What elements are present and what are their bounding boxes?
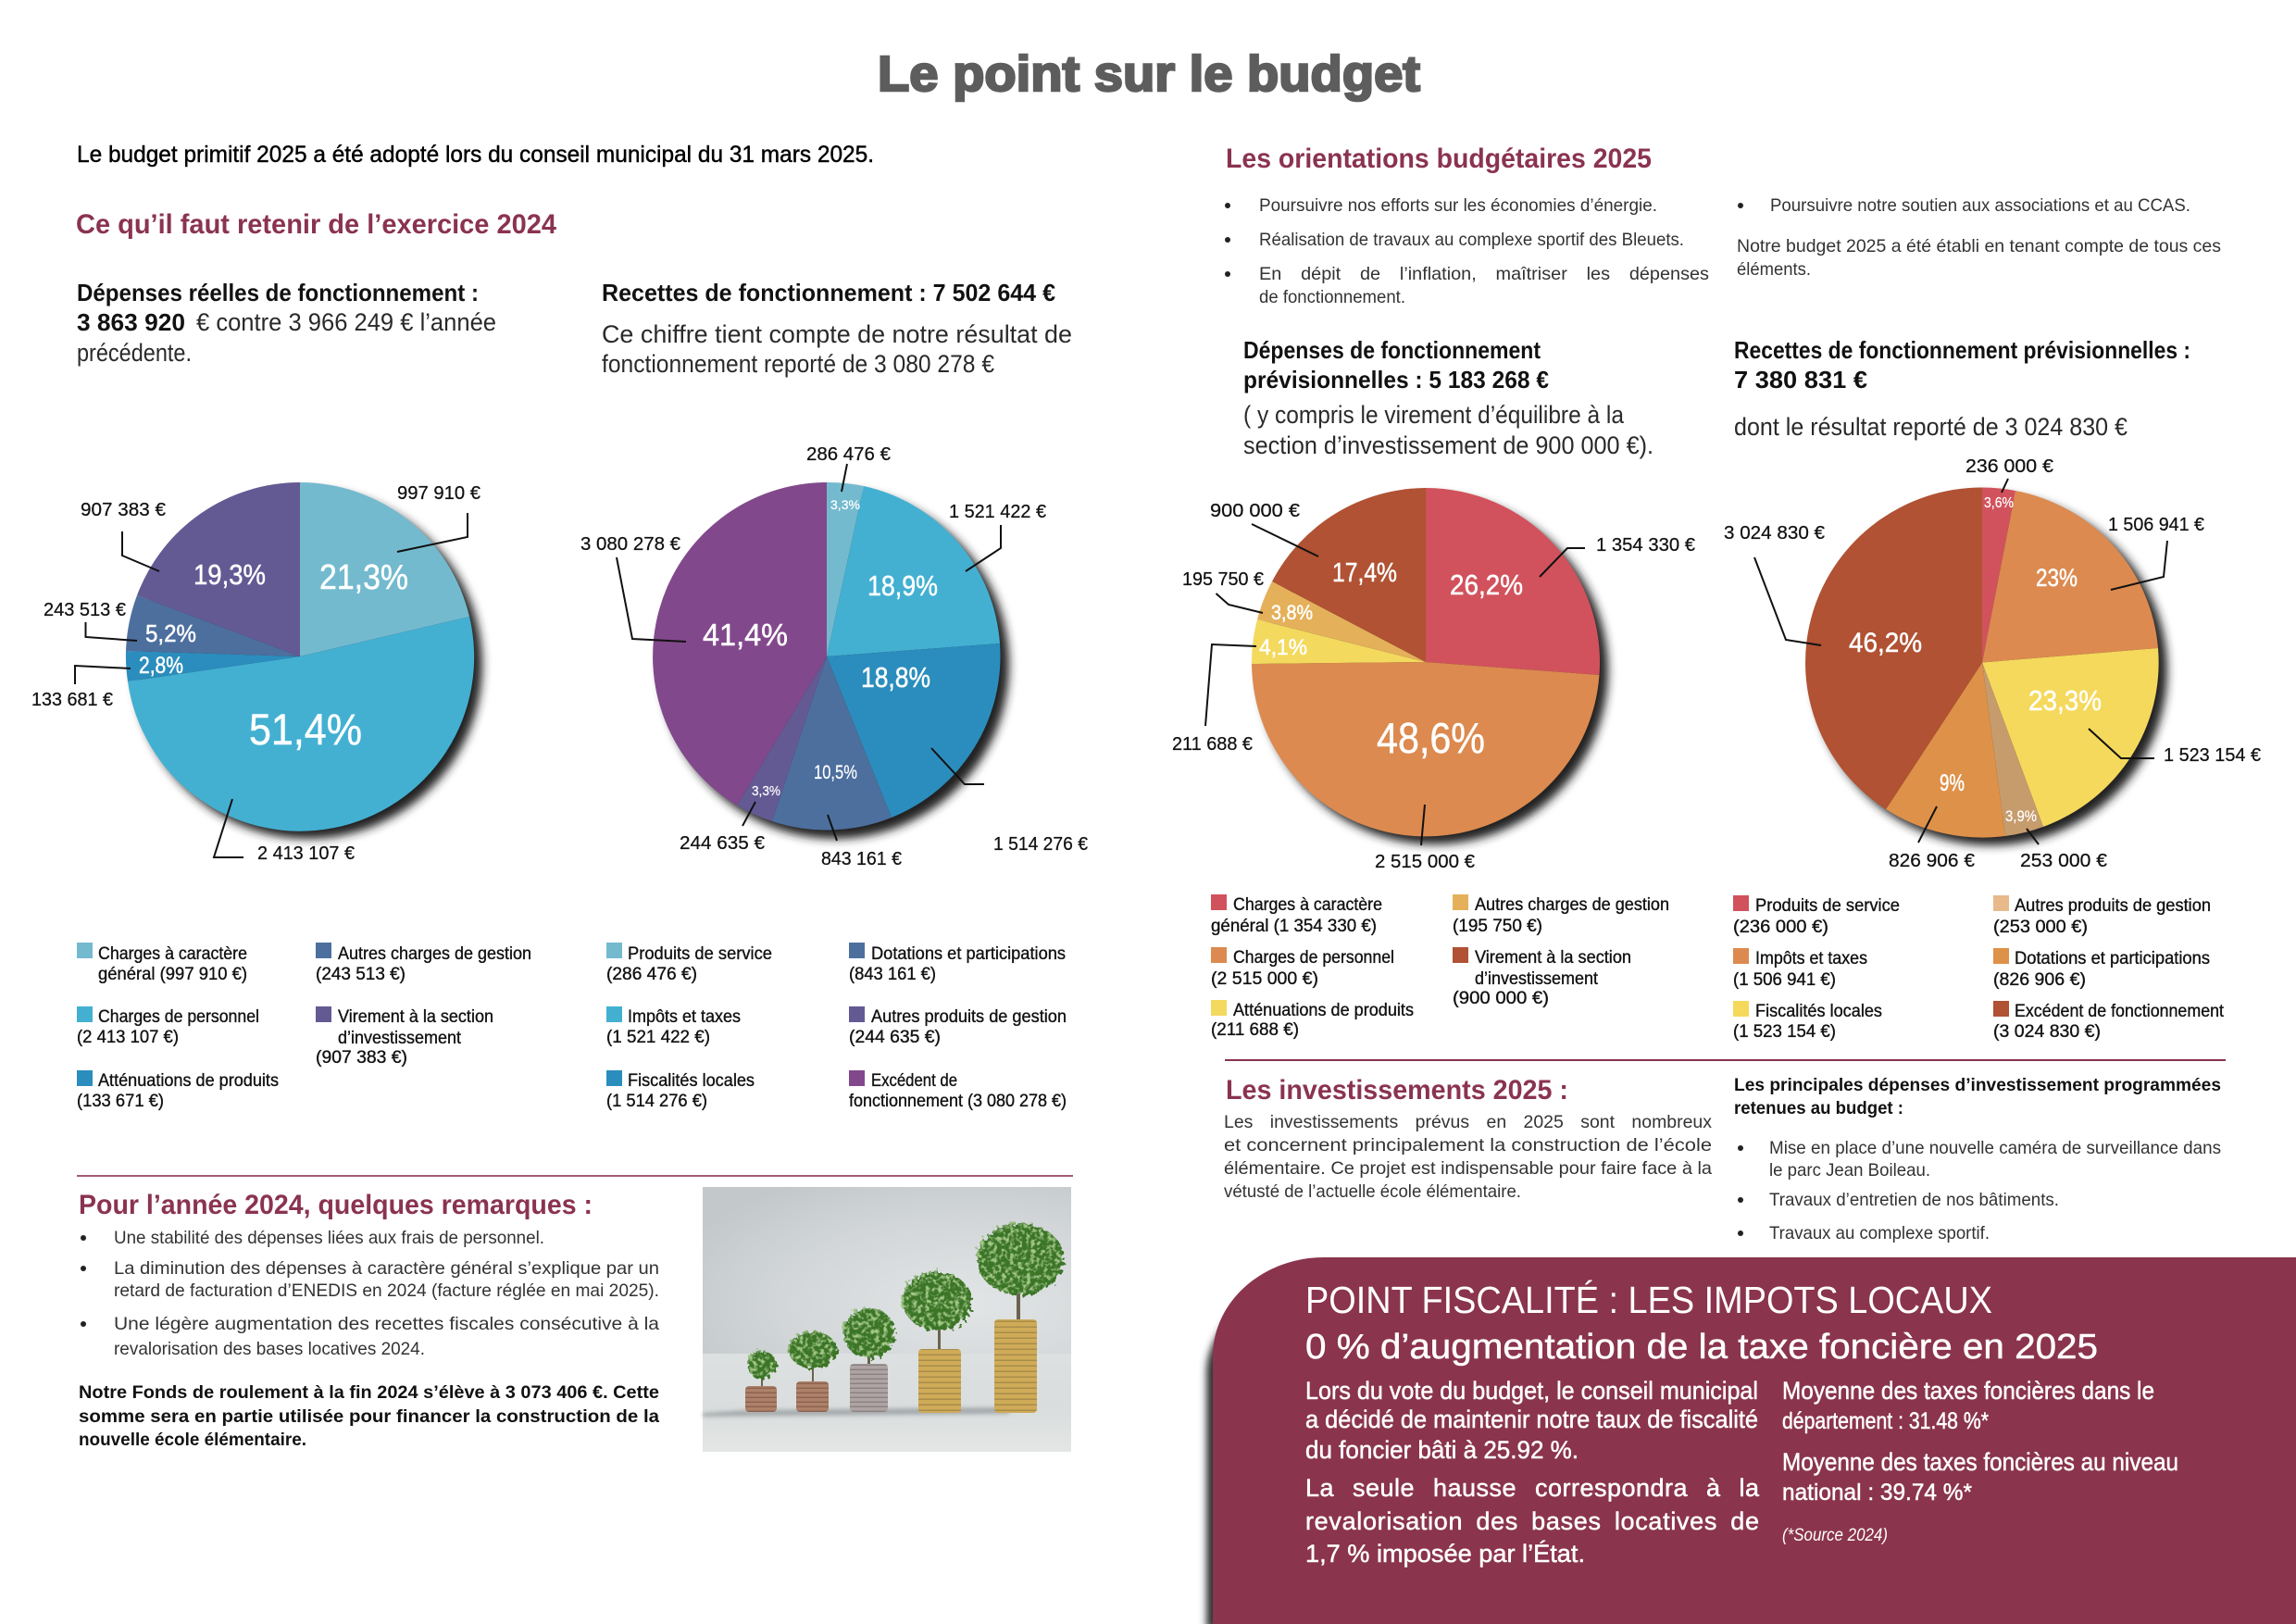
pie chart: recettes prévisionnelles 2025 [1724, 456, 2261, 871]
legend: dépenses 2025: Charges à caractère [1233, 895, 1382, 915]
pie chart: recettes 2024: 18,8% [861, 661, 930, 693]
text block: dépenses réelles: 3 863 920 [77, 308, 185, 336]
pie chart: recettes 2024: 843 161 € [821, 849, 902, 869]
bullet list: remarques: La diminution des dépenses à caractère général s’explique par un [114, 1258, 659, 1279]
pie chart: recettes prévisionnelles 2025: 3 024 830 € [1724, 523, 1825, 543]
legend: recettes 2024: Autres produits de gestion [871, 1007, 1067, 1027]
panel: remarques 2024 [79, 1190, 659, 1450]
legend: recettes 2024: (286 476 €) [606, 965, 697, 984]
pie chart: recettes 2024: 10,5% [814, 762, 857, 783]
pie chart: recettes 2024: 41,4% [703, 618, 788, 652]
legend: dépenses 2024: (133 671 €) [77, 1092, 164, 1111]
text block: investissements: vétusté de l’actuelle école élémentaire. [1224, 1181, 1521, 1202]
legend: recettes 2024: Excédent de [871, 1071, 957, 1091]
bullet list: remarques: retard de facturation d’ENEDIS en 2024 (facture réglée en mai 2025). [114, 1280, 659, 1301]
legend: recettes 2024: (843 161 €) [849, 965, 936, 984]
pie chart: dépenses prévisionnelles 2025: 4,1% [1259, 635, 1307, 660]
legend: dépenses 2024: (2 413 107 €) [77, 1028, 179, 1047]
pie chart: recettes prévisionnelles 2025: 236 000 € [1965, 456, 2053, 477]
bullet list: remarques: Une légère augmentation des recettes fiscales consécutive à la [114, 1314, 659, 1334]
legend: recettes 2025 [1733, 895, 2225, 1042]
pie chart: dépenses réelles 2024: 243 513 € [44, 600, 126, 620]
pie chart: dépenses réelles 2024: 133 681 € [31, 690, 113, 710]
pie chart: dépenses réelles 2024: 21,3% [319, 558, 408, 597]
pie chart: recettes 2024: 1 521 422 € [949, 502, 1046, 522]
pie chart: recettes 2024: 244 635 € [680, 833, 765, 854]
text block: moyennes des taxes: Moyenne des taxes foncières dans le [1782, 1377, 2154, 1405]
pie chart: dépenses réelles 2024 [31, 482, 482, 864]
text block: dépenses prévisionnelles [1243, 336, 1653, 459]
text block: fonds de roulement [79, 1382, 659, 1450]
pie chart: recettes 2024: 3,3% [830, 497, 860, 512]
text block: recettes de fonctionnement: Recettes de fonctionnement : 7 502 644 € [602, 279, 1055, 306]
text block: dépenses réelles: Dépenses réelles de fonctionnement : [77, 279, 479, 306]
text block: investissements [1224, 1112, 1712, 1202]
pie chart: dépenses réelles 2024: 2 413 107 € [257, 843, 355, 864]
bullet list: orientations left: Poursuivre nos efforts sur les économies d’énergie. [1259, 195, 1657, 216]
legend: recettes 2024: Dotations et participations [871, 944, 1066, 964]
bullet list: orientations right: Notre budget 2025 a été établi en tenant compte de tous ces [1737, 236, 2221, 256]
text block: principales dépenses: Travaux d’entretien de nos bâtiments. [1769, 1190, 2059, 1210]
bullet list: orientations left: Réalisation de travaux au complexe sportif des Bleuets. [1259, 230, 1684, 250]
text block: principales dépenses: le parc Jean Boileau. [1769, 1160, 1930, 1181]
legend: recettes 2024: Fiscalités locales [628, 1071, 755, 1091]
pie chart: recettes 2024: 286 476 € [806, 444, 891, 465]
pie chart: recettes 2024: 3,3% [752, 783, 780, 799]
legend: recettes 2024: (244 635 €) [849, 1028, 941, 1047]
legend: dépenses 2025: (195 750 €) [1453, 917, 1542, 936]
pie chart: dépenses réelles 2024: 51,4% [249, 705, 362, 754]
text block: moyennes des taxes [1782, 1377, 2178, 1545]
legend: recettes 2024: (1 514 276 €) [606, 1092, 707, 1111]
legend: recettes 2024: Impôts et taxes [628, 1007, 741, 1027]
heading: orientations budgétaires: Les orientations budgétaires 2025 [1226, 144, 1652, 174]
legend: recettes 2025: Produits de service [1755, 896, 1900, 916]
legend: dépenses 2025: Virement à la section [1475, 948, 1631, 968]
legend: dépenses 2025: Charges de personnel [1233, 948, 1394, 968]
bullet list: orientations right: Poursuivre notre soutien aux associations et au CCAS. [1770, 195, 2190, 216]
text block: dépenses réelles: précédente. [77, 339, 192, 367]
bullet list: remarques [81, 1228, 659, 1359]
pie chart: recettes prévisionnelles 2025: 23% [2036, 564, 2078, 592]
text block: principales dépenses: Mise en place d’une nouvelle caméra de surveillance dans [1769, 1138, 2221, 1158]
bullet list: remarques: revalorisation des bases locatives 2024. [114, 1339, 425, 1359]
bullet list: remarques: Une stabilité des dépenses liées aux frais de personnel. [114, 1228, 544, 1248]
legend: dépenses 2024: Autres charges de gestion [338, 944, 531, 964]
legend: recettes 2025: (826 906 €) [1993, 970, 2086, 990]
legend: recettes 2024: Produits de service [628, 944, 772, 964]
legend: recettes 2025: (3 024 830 €) [1993, 1022, 2101, 1042]
bullet list: orientations left [1225, 195, 1709, 307]
text block: fonds de roulement: nouvelle école élémentaire. [79, 1430, 306, 1450]
text block: recettes prévisionnelles: Recettes de fonctionnement prévisionnelles : [1734, 336, 2190, 364]
text block: principales dépenses: retenues au budget : [1734, 1098, 1903, 1118]
text block: vote du budget: Lors du vote du budget, le conseil municipal [1305, 1377, 1758, 1405]
legend: recettes 2025: (253 000 €) [1993, 918, 2088, 937]
text block: vote du budget: La seule hausse correspondra à la [1305, 1474, 1760, 1502]
pie chart: recettes 2024: 3 080 278 € [580, 534, 680, 555]
legend: dépenses 2025: (900 000 €) [1453, 989, 1549, 1008]
text block: dépenses prévisionnelles: Dépenses de fonctionnement [1243, 336, 1541, 364]
pie chart: recettes prévisionnelles 2025: 9% [1940, 770, 1965, 796]
bullet list: orientations right: éléments. [1737, 259, 1811, 280]
pie chart: dépenses prévisionnelles 2025 [1172, 488, 1695, 872]
legend: dépenses 2025: Atténuations de produits [1233, 1001, 1414, 1020]
pie chart: dépenses prévisionnelles 2025: 17,4% [1332, 558, 1397, 588]
text block: recettes prévisionnelles [1734, 336, 2190, 441]
pie chart: dépenses prévisionnelles 2025: 195 750 € [1182, 569, 1264, 590]
legend: dépenses 2024: (243 513 €) [316, 965, 406, 984]
text block: principales dépenses: Travaux au complexe sportif. [1769, 1223, 1990, 1243]
text block: moyennes des taxes: (*Source 2024) [1782, 1526, 1888, 1545]
panel: point fiscalité [1206, 1257, 2296, 1624]
text block: dépenses réelles [77, 279, 496, 367]
pie chart: dépenses prévisionnelles 2025: 26,2% [1450, 568, 1523, 601]
legend: recettes 2025: (236 000 €) [1733, 918, 1828, 937]
legend: recettes 2024: fonctionnement (3 080 278 €) [849, 1092, 1067, 1111]
pie chart: dépenses prévisionnelles 2025: 2 515 000 € [1375, 852, 1475, 872]
pie chart: recettes prévisionnelles 2025: 23,3% [2028, 684, 2102, 717]
legend: dépenses 2025 [1211, 894, 1669, 1040]
pie chart: dépenses réelles 2024: 19,3% [193, 558, 266, 591]
text block: moyennes des taxes: Moyenne des taxes foncières au niveau [1782, 1448, 2178, 1476]
legend: dépenses 2024: (907 383 €) [316, 1048, 407, 1068]
text block: principales dépenses [1734, 1075, 2221, 1243]
text block: moyennes des taxes: département : 31.48 %* [1782, 1408, 1989, 1434]
pie chart: recettes prévisionnelles 2025: 3,9% [2005, 807, 2037, 825]
text block: dépenses réelles: € contre 3 966 249 € l’année [196, 308, 496, 336]
pie chart: recettes 2024 [580, 444, 1088, 869]
pie chart: recettes prévisionnelles 2025: 1 523 154 € [2164, 745, 2261, 766]
pie chart: recettes 2024: 1 514 276 € [993, 834, 1088, 855]
text block: fonds de roulement: somme sera en partie utilisée pour financer la construction de la [79, 1406, 659, 1427]
legend: dépenses 2024: Charges de personnel [98, 1007, 259, 1027]
pie chart: recettes prévisionnelles 2025: 826 906 € [1889, 851, 1975, 871]
text block: dépenses prévisionnelles: ( y compris le virement d’équilibre à la [1243, 401, 1625, 429]
pie chart: dépenses réelles 2024: 997 910 € [397, 483, 480, 504]
pie chart: dépenses réelles 2024: 907 383 € [81, 500, 166, 520]
legend: dépenses 2025: Autres charges de gestion [1475, 895, 1669, 915]
pie chart: recettes prévisionnelles 2025: 253 000 € [2020, 851, 2107, 871]
legend: recettes 2025: Autres produits de gestion [2015, 896, 2211, 916]
text block: investissements: Les investissements prévus en 2025 sont nombreux [1224, 1112, 1712, 1132]
legend: recettes 2024 [606, 943, 1067, 1111]
legend: dépenses 2025: (211 688 €) [1211, 1020, 1299, 1040]
legend: recettes 2025: Excédent de fonctionnement [2015, 1002, 2225, 1021]
legend: dépenses 2025: général (1 354 330 €) [1211, 917, 1377, 936]
panel: investissements [1224, 1075, 2221, 1243]
legend: dépenses 2024: d’investissement [338, 1029, 462, 1048]
pie chart: recettes 2024: 18,9% [867, 569, 938, 602]
heading: investissements: Les investissements 2025 : [1226, 1075, 1568, 1106]
title: Le point sur le budget [878, 46, 1420, 102]
text block: investissements: élémentaire. Ce projet est indispensable pour faire face à la [1224, 1158, 1712, 1179]
text block: recettes prévisionnelles: 7 380 831 € [1734, 366, 1867, 394]
pie chart: dépenses prévisionnelles 2025: 3,8% [1271, 601, 1313, 624]
legend: dépenses 2025: d’investissement [1475, 969, 1599, 989]
legend: dépenses 2024: général (997 910 €) [98, 965, 247, 984]
legend: recettes 2025: (1 523 154 €) [1733, 1022, 1836, 1042]
legend: dépenses 2024: Virement à la section [338, 1007, 493, 1027]
legend: dépenses 2024 [77, 943, 531, 1111]
pie chart: dépenses prévisionnelles 2025: 48,6% [1377, 714, 1485, 762]
heading: remarques: Pour l’année 2024, quelques remarques : [79, 1190, 593, 1220]
intro sentence: Le budget primitif 2025 a été adopté lors du conseil municipal du 31 mars 2025. [77, 142, 874, 168]
bullet list: orientations left: En dépit de l’inflation, maîtriser les dépenses [1259, 264, 1709, 284]
pie chart: recettes prévisionnelles 2025: 3,6% [1984, 495, 2014, 511]
legend: recettes 2025: Fiscalités locales [1755, 1002, 1882, 1021]
pie chart: dépenses prévisionnelles 2025: 211 688 € [1172, 734, 1253, 755]
text block: principales dépenses: Les principales dépenses d’investissement programmées [1734, 1075, 2221, 1095]
bullet list: orientations left: de fonctionnement. [1259, 287, 1405, 307]
legend: dépenses 2024: Atténuations de produits [98, 1071, 279, 1091]
heading: point fiscalité [1305, 1279, 2098, 1367]
heading: exercice 2024: Ce qu’il faut retenir de l’exercice 2024 [76, 209, 556, 240]
legend: recettes 2025: (1 506 941 €) [1733, 970, 1836, 990]
pie chart: dépenses prévisionnelles 2025: 1 354 330 € [1596, 535, 1695, 556]
pie chart: recettes prévisionnelles 2025: 46,2% [1849, 628, 1922, 658]
text block: dépenses prévisionnelles: prévisionnelles : 5 183 268 € [1243, 366, 1549, 394]
text block: vote du budget: 1,7 % imposée par l’État. [1305, 1540, 1585, 1568]
pie chart: recettes prévisionnelles 2025: 1 506 941 € [2108, 515, 2204, 535]
text block: vote du budget: a décidé de maintenir notre taux de fiscalité [1305, 1405, 1758, 1433]
legend: dépenses 2025: (2 515 000 €) [1211, 969, 1318, 989]
text block: dépenses prévisionnelles: section d’investissement de 900 000 €). [1243, 431, 1653, 459]
photo: trees growing on coin stacks [703, 1187, 1071, 1452]
pie chart: dépenses réelles 2024: 5,2% [145, 619, 196, 647]
pie chart: dépenses réelles 2024: 2,8% [139, 653, 183, 679]
pie chart: dépenses prévisionnelles 2025: 900 000 € [1210, 501, 1300, 521]
heading: point fiscalité: POINT FISCALITÉ : LES IMPOTS LOCAUX [1305, 1279, 1992, 1321]
text block: investissements: et concernent principalement la construction de l’école [1224, 1135, 1712, 1156]
text block: vote du budget: du foncier bâti à 25.92 %. [1305, 1436, 1578, 1464]
text block: recettes de fonctionnement [602, 279, 1072, 378]
text block: vote du budget [1305, 1377, 1760, 1568]
text block: fonds de roulement: Notre Fonds de roulement à la fin 2024 s’élève à 3 073 406 €. Cette [79, 1382, 659, 1403]
text block: recettes de fonctionnement: fonctionnement reporté de 3 080 278 € [602, 350, 994, 378]
text block: recettes prévisionnelles: dont le résultat reporté de 3 024 830 € [1734, 413, 2128, 441]
bullet list: orientations right [1737, 195, 2221, 280]
text block: vote du budget: revalorisation des bases locatives de [1305, 1507, 1759, 1535]
text block: recettes de fonctionnement: Ce chiffre tient compte de notre résultat de [602, 320, 1072, 348]
legend: recettes 2025: Dotations et participations [2015, 949, 2210, 968]
legend: dépenses 2024: Charges à caractère [98, 944, 247, 964]
legend: recettes 2025: Impôts et taxes [1755, 949, 1867, 968]
text block: moyennes des taxes: national : 39.74 %* [1782, 1480, 1972, 1505]
heading: point fiscalité: 0 % d’augmentation de la taxe foncière en 2025 [1305, 1328, 2098, 1367]
legend: recettes 2024: (1 521 422 €) [606, 1028, 710, 1047]
